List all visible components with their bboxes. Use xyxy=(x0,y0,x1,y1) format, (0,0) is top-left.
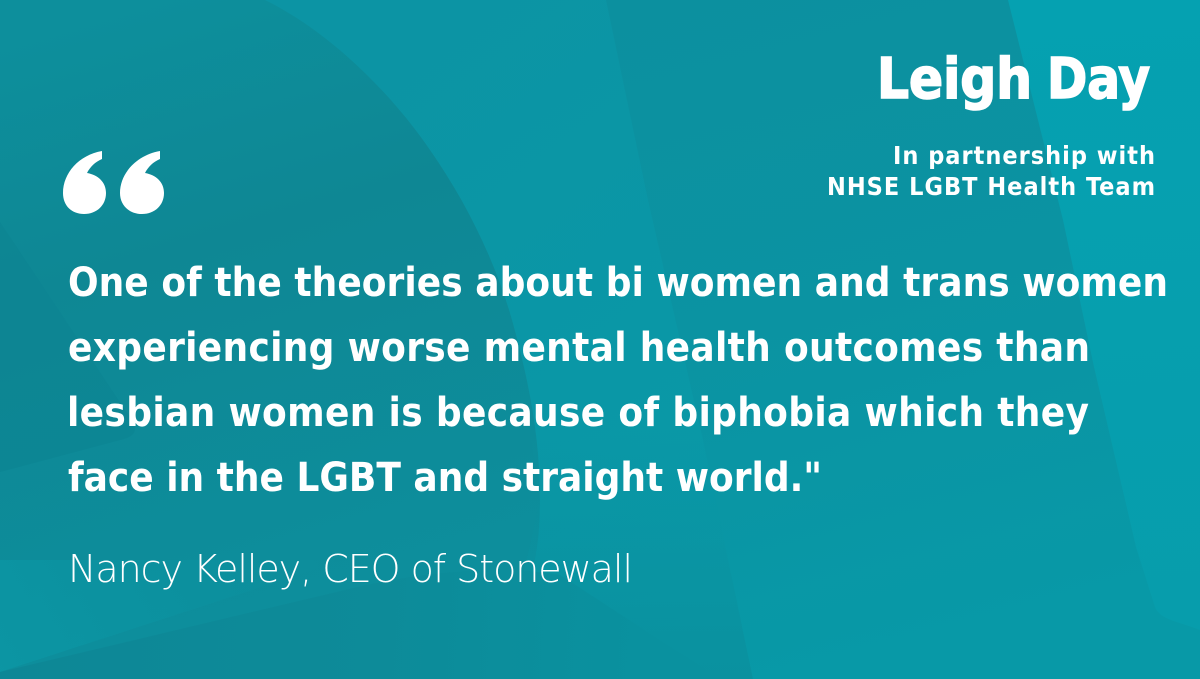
logo: Leigh Day: Leigh xyxy=(877,47,1032,112)
logo: Leigh Day xyxy=(877,47,1150,112)
quote text: face in the LGBT and straight world." xyxy=(68,455,822,501)
background: dark wedge xyxy=(606,0,1200,679)
attribution: Nancy Kelley, CEO of Stonewall xyxy=(68,547,633,591)
logo: Leigh Day: Day xyxy=(1047,47,1150,112)
background: lower-left band xyxy=(0,560,345,672)
icon: opening quotation mark xyxy=(63,151,164,214)
background: bottom wedge xyxy=(0,570,720,679)
partnership text xyxy=(827,141,1155,201)
background: circle shape xyxy=(0,0,540,679)
partnership text: In partnership with xyxy=(893,141,1155,170)
partnership text: NHSE LGBT Health Team xyxy=(827,172,1155,201)
quote text: One of the theories about bi women and trans women xyxy=(68,260,1168,306)
background: lower-middle fade xyxy=(500,430,753,679)
quote text xyxy=(67,260,1168,501)
background: left angular shape xyxy=(0,222,135,472)
background: right band xyxy=(1008,0,1200,630)
quote text: lesbian women is because of biphobia which they xyxy=(67,390,1089,436)
quote text: experiencing worse mental health outcomes than xyxy=(68,325,1090,371)
